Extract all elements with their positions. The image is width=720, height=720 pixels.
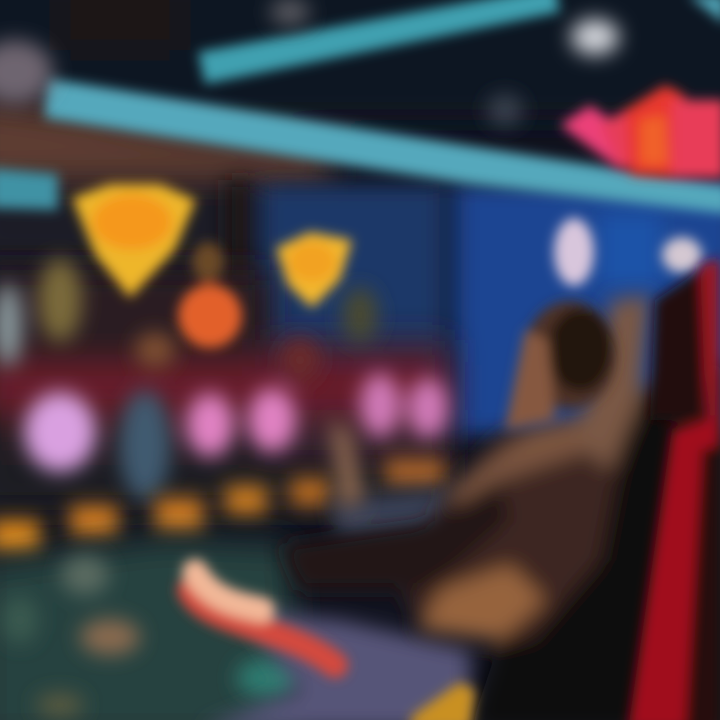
- red fan sign: [560, 85, 720, 178]
- red chair: [628, 258, 720, 720]
- sign: orange blob: [178, 284, 242, 348]
- slot machine row background: [0, 270, 450, 510]
- beam: main cyan: [45, 78, 720, 214]
- beam: left cyan: [0, 168, 58, 210]
- ceiling: [0, 0, 720, 265]
- back: [400, 410, 625, 640]
- arm down to table: [280, 480, 510, 590]
- shoulder highlight: [450, 415, 600, 520]
- orange floor lights row: [0, 458, 445, 552]
- sign: large yellow heart: [72, 184, 196, 298]
- beam: upper teal: [198, 0, 560, 84]
- chair shadow: [470, 360, 720, 720]
- lower back highlight: [420, 565, 545, 640]
- person: [280, 295, 720, 720]
- sign: small yellow heart: [276, 232, 352, 308]
- slot machines: [0, 258, 448, 500]
- orange accent bottom: [410, 682, 475, 720]
- raised arm: [575, 295, 650, 470]
- card table: [0, 540, 300, 720]
- bright signs: [72, 184, 702, 348]
- ceiling beams: [0, 0, 720, 214]
- ceiling lights: [0, 0, 619, 126]
- head: [505, 301, 616, 430]
- table edge: pink curve: [190, 572, 335, 665]
- table edge: purple: [200, 490, 470, 720]
- lights: blue wall white shapes: [554, 218, 594, 286]
- blue wall panels: [225, 180, 720, 440]
